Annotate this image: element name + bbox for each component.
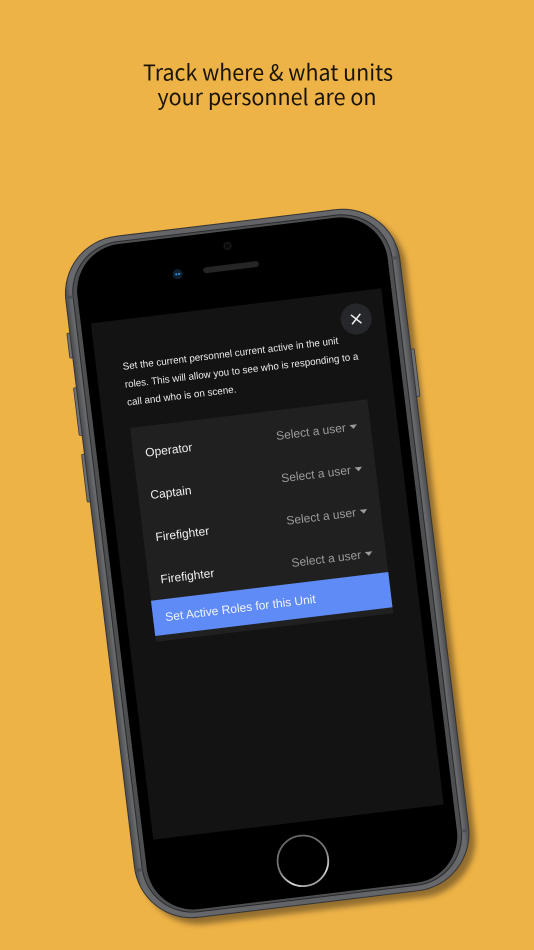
row: firefighter bbox=[160, 546, 373, 586]
row: operator bbox=[144, 419, 358, 460]
submit button: Set Active Roles for this Unit bbox=[165, 592, 317, 624]
phone shadow bbox=[66, 208, 482, 931]
screen background bbox=[91, 288, 444, 840]
title bbox=[143, 56, 393, 112]
instruction text: call and who is on scene. bbox=[127, 384, 237, 409]
panel: role form bbox=[130, 399, 393, 642]
row: captain: Select a user bbox=[280, 463, 352, 485]
row: firefighter: Firefighter bbox=[155, 524, 210, 544]
icon: front camera bbox=[224, 242, 231, 250]
phone body bbox=[58, 202, 476, 925]
form background bbox=[130, 399, 393, 642]
instruction text bbox=[122, 334, 362, 409]
close button bbox=[339, 302, 373, 336]
icon: sensor lens bbox=[172, 269, 183, 280]
row: operator: Operator bbox=[144, 440, 193, 460]
row: operator: Select a user bbox=[275, 421, 347, 443]
title: Track where & what units bbox=[143, 56, 393, 88]
instruction text: Set the current personnel current active in the unit bbox=[122, 336, 339, 373]
side buttons bbox=[67, 292, 428, 502]
speaker bbox=[203, 261, 259, 274]
submit button bbox=[151, 572, 393, 636]
row: captain: Captain bbox=[150, 483, 192, 502]
instruction text: roles. This will allow you to see who is responding to a bbox=[124, 352, 359, 391]
row: firefighter: Select a user bbox=[291, 548, 362, 570]
phone bbox=[56, 202, 482, 932]
row: firefighter: Select a user bbox=[286, 505, 357, 528]
panel: app screen bbox=[91, 288, 444, 840]
row: firefighter bbox=[155, 504, 368, 544]
title: your personnel are on bbox=[158, 80, 376, 112]
row: captain bbox=[149, 462, 363, 502]
home button bbox=[275, 833, 331, 889]
row: firefighter: Firefighter bbox=[160, 566, 215, 586]
